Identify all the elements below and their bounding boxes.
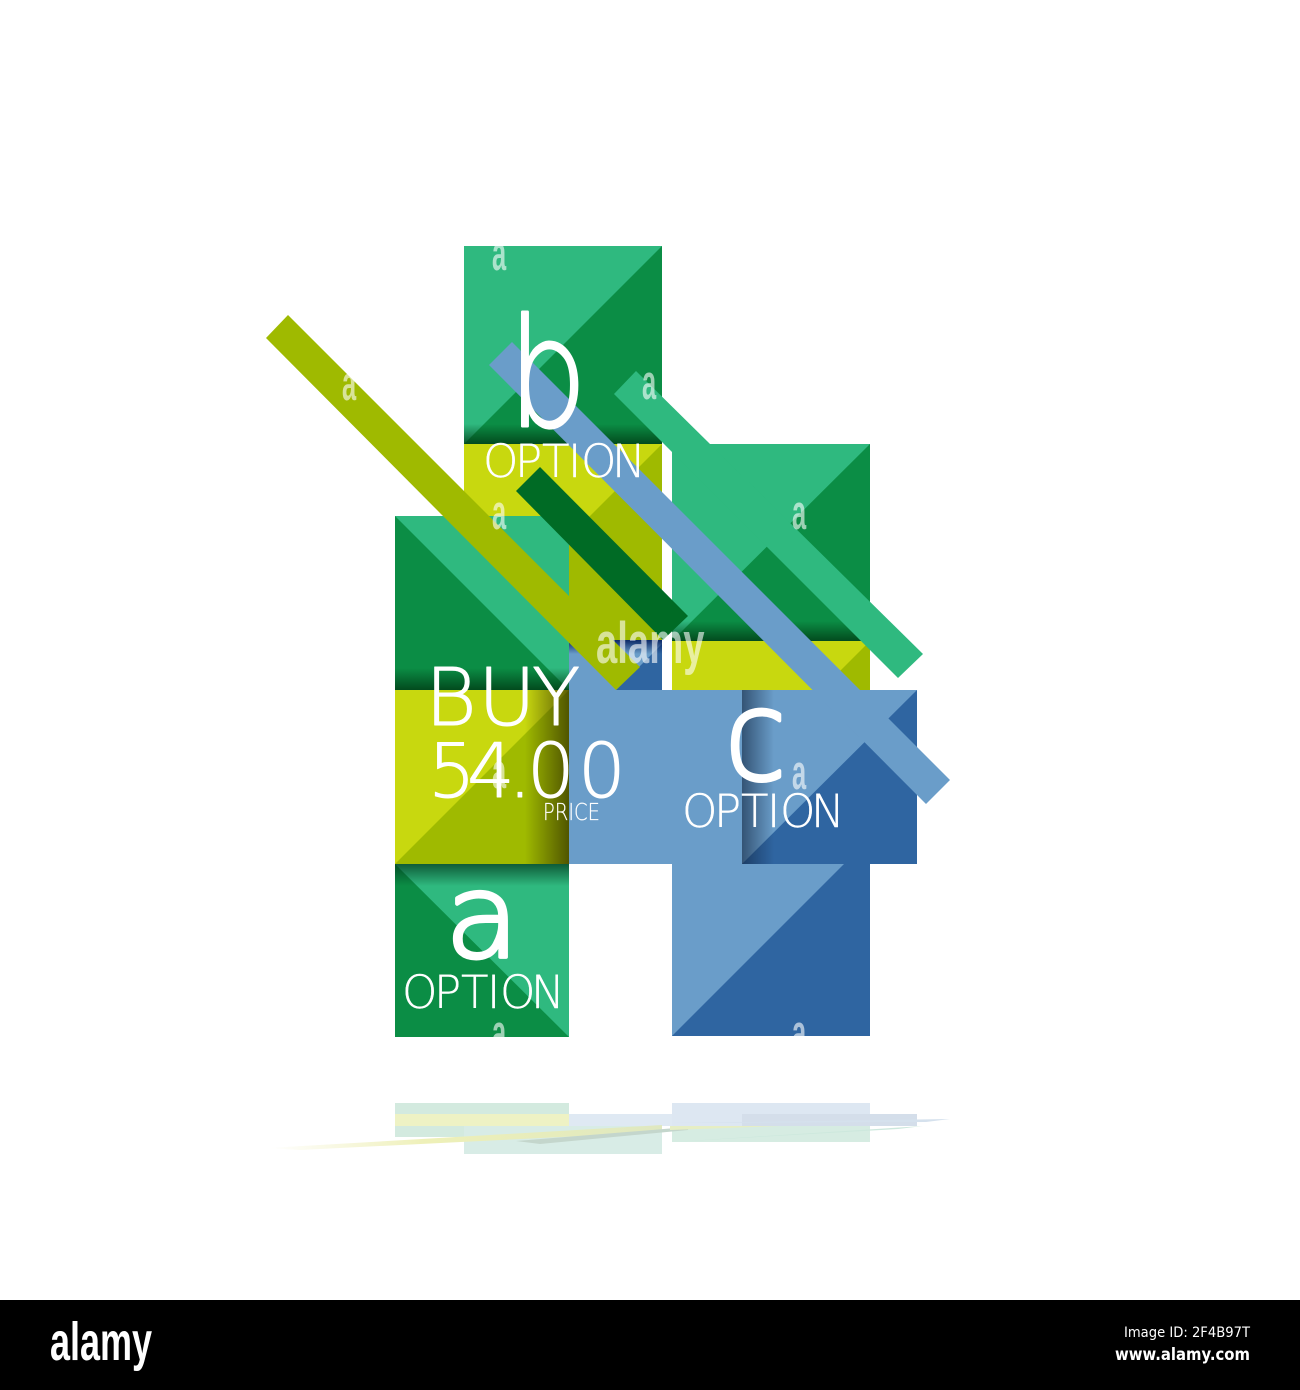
panel: lime price block <box>395 690 569 864</box>
footer bar <box>0 1300 1300 1390</box>
label: buy price <box>425 652 626 826</box>
diagonal bar: olive <box>266 315 640 690</box>
image id: Image ID: 2F4B97T <box>1124 1325 1250 1341</box>
website: www.alamy.com <box>1115 1345 1250 1365</box>
label: option c: OPTION <box>682 785 845 838</box>
label: buy price: PRICE <box>543 800 600 826</box>
diagonal bar: blue <box>489 342 950 804</box>
watermarks: a <box>492 745 506 799</box>
panel: option b green square <box>464 246 662 444</box>
label: option c <box>682 664 845 838</box>
watermarks: a <box>792 746 806 800</box>
reflection <box>268 1103 950 1154</box>
panel: option a green square <box>395 864 569 1037</box>
diagonal bar: dark green <box>516 467 688 640</box>
footer logo: alamy <box>50 1311 152 1372</box>
watermarks: a <box>642 356 656 410</box>
watermarks: a <box>492 227 506 281</box>
panel: lime block behind option b <box>464 444 662 642</box>
panel: right lime strip <box>672 641 870 690</box>
watermarks: a <box>792 486 806 540</box>
watermarks <box>342 227 806 1060</box>
watermarks: a <box>342 357 356 411</box>
label: option a: OPTION <box>402 966 565 1019</box>
panel: right green square <box>672 444 870 641</box>
label: option b: OPTION <box>483 435 646 488</box>
panel: left green square <box>395 516 569 690</box>
panel: lower blue square <box>672 864 870 1036</box>
diagonal bar: green <box>614 371 923 678</box>
panel: middle blue block <box>569 690 742 864</box>
watermarks: alamy <box>596 612 705 676</box>
panel: small blue square behind bars <box>569 640 662 690</box>
label: buy price: 54.00 <box>428 727 626 815</box>
label: buy price: BUY <box>425 652 580 744</box>
watermarks: a <box>792 1006 806 1060</box>
label: option c: c <box>725 664 786 808</box>
panel: option c blue square <box>742 690 917 864</box>
label: option b: b <box>508 287 587 462</box>
label: option a <box>402 851 565 1019</box>
watermarks: a <box>492 486 506 540</box>
label: option b <box>483 287 646 488</box>
watermarks: a <box>492 1006 506 1060</box>
label: option a: a <box>445 851 520 985</box>
